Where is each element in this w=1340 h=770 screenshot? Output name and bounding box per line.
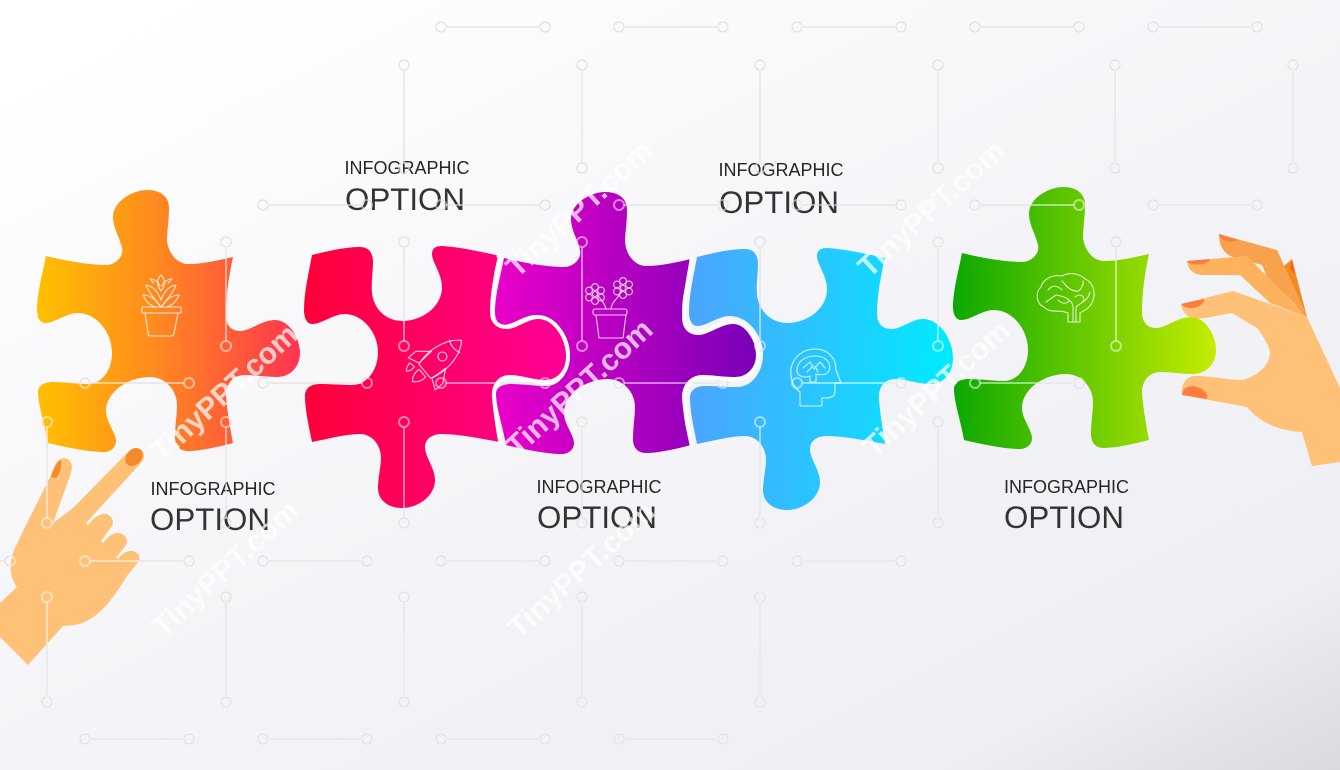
- watermark: TinyPPT.com: [500, 313, 659, 463]
- ring finger: [1219, 234, 1307, 316]
- icon: succulent plant: [142, 275, 181, 336]
- puzzle piece: blue: [689, 248, 953, 510]
- icon: flowers in pot: [586, 278, 632, 338]
- fingernail: little finger: [51, 460, 61, 478]
- thumb, index and palm: [1181, 291, 1340, 466]
- text: option bottom left: [150, 479, 276, 537]
- text: option top left: [344, 158, 470, 217]
- icon: brain: [1037, 274, 1094, 322]
- right hand: [1181, 234, 1340, 466]
- text: option top right: [718, 160, 844, 220]
- watermark: TinyPPT.com: [852, 134, 1011, 284]
- hand shape: [0, 448, 144, 665]
- icon: rocket: [399, 324, 475, 398]
- text: option bottom right: OPTION: [1004, 500, 1124, 535]
- text: option top left: OPTION: [345, 182, 465, 217]
- left hand: [0, 445, 146, 665]
- text: option bottom center: INFOGRAPHIC: [536, 477, 662, 497]
- text: option bottom center: [536, 477, 662, 535]
- text: option top right: OPTION: [719, 185, 839, 220]
- text: option top right: INFOGRAPHIC: [718, 160, 844, 180]
- text: option bottom right: INFOGRAPHIC: [1004, 477, 1129, 497]
- watermark: [145, 134, 1016, 645]
- icon: head with brain: [791, 349, 841, 406]
- little fingernail: [1290, 259, 1295, 275]
- puzzle piece: green: [953, 187, 1216, 449]
- little finger: [1284, 259, 1307, 317]
- text: option bottom center: OPTION: [537, 500, 657, 535]
- watermark: TinyPPT.com: [145, 318, 304, 468]
- text: option bottom left: OPTION: [150, 502, 270, 537]
- puzzle piece: pink: [304, 246, 568, 508]
- watermark: TinyPPT.com: [502, 495, 661, 645]
- watermark: TinyPPT.com: [857, 314, 1016, 464]
- middle finger: [1187, 256, 1307, 317]
- watermark: TinyPPT.com: [146, 494, 305, 644]
- puzzle piece: purple: [495, 192, 758, 454]
- fingernail: index: [122, 445, 146, 469]
- text: option top left: INFOGRAPHIC: [344, 158, 470, 178]
- text: option bottom left: INFOGRAPHIC: [150, 479, 276, 499]
- puzzle piece: orange: [37, 190, 300, 452]
- watermark: TinyPPT.com: [500, 134, 659, 284]
- text: option bottom right: [1004, 477, 1129, 535]
- fingernails: [1181, 234, 1238, 399]
